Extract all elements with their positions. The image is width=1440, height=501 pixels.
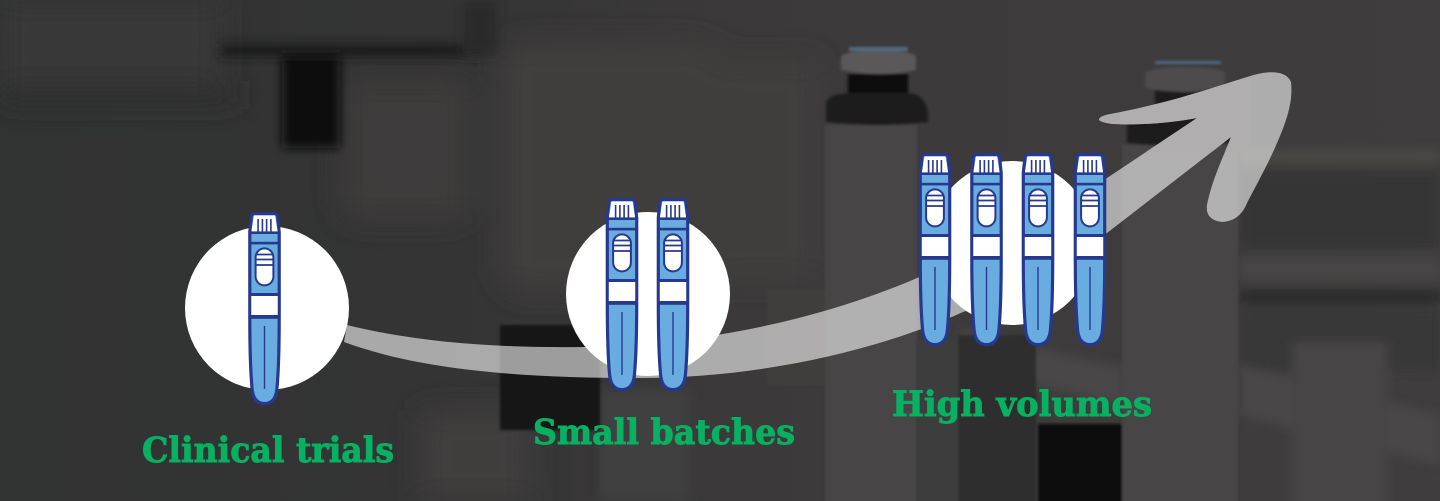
icon: injector pen 1 bbox=[607, 200, 637, 390]
stage: high volumes bbox=[892, 155, 1152, 425]
label: small batches: Small batches bbox=[533, 412, 795, 453]
icon: injector pen 2 bbox=[972, 155, 1002, 345]
white circle bbox=[185, 226, 349, 390]
icon: injector pen bbox=[250, 214, 280, 404]
growth arrow bbox=[344, 72, 1291, 378]
white circle bbox=[566, 212, 730, 376]
label: high volumes: High volumes bbox=[892, 384, 1152, 425]
icon: injector pen 1 bbox=[920, 155, 950, 345]
stage: clinical trials bbox=[142, 214, 394, 471]
icon: injector pen 2 bbox=[658, 200, 688, 390]
icon: injector pen 4 bbox=[1075, 155, 1105, 345]
stage: small batches bbox=[533, 200, 795, 453]
white circle bbox=[930, 161, 1094, 325]
label: clinical trials: Clinical trials bbox=[142, 430, 394, 471]
icon: injector pen 3 bbox=[1023, 155, 1053, 345]
